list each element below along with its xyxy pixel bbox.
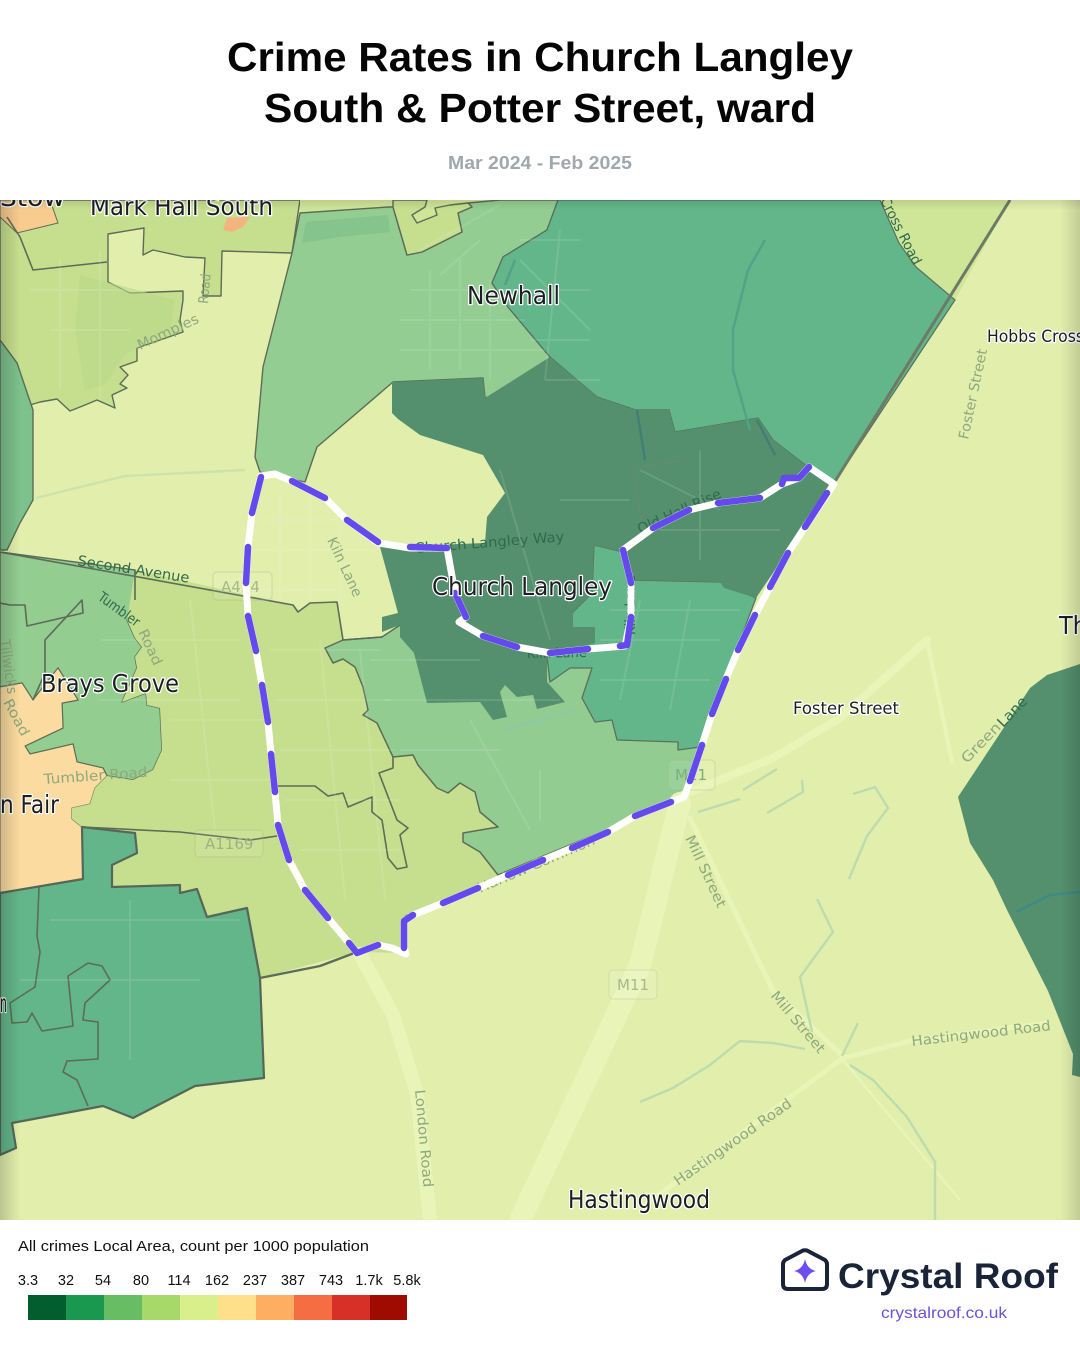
place labels: n bbox=[0, 989, 7, 1018]
road labels: Old Hall Rise bbox=[635, 486, 724, 538]
road labels bbox=[0, 195, 1052, 1189]
legend scale labels: 3.3 bbox=[18, 1273, 38, 1289]
road labels: Tumbler bbox=[94, 589, 143, 631]
website: crystalroof.co.uk bbox=[881, 1305, 1008, 1322]
road shields bbox=[195, 572, 715, 999]
region: Potter Street medium green bbox=[325, 625, 705, 875]
place labels: Hastingwood bbox=[568, 1185, 710, 1214]
title: Crime Rates in Church Langley bbox=[227, 34, 853, 80]
region: Newhall medium green bbox=[255, 200, 558, 482]
residential streets bbox=[20, 205, 780, 1060]
icon: house with star bbox=[783, 1250, 827, 1289]
place labels: Brays Grove bbox=[41, 669, 179, 698]
road labels: Kiln Lane bbox=[623, 575, 639, 635]
road labels: Tumbler Road bbox=[42, 765, 148, 788]
road labels: Road bbox=[196, 273, 215, 304]
region: north-west light green bbox=[0, 200, 300, 411]
ward boundary: purple dashes bbox=[246, 467, 827, 953]
legend scale labels: 237 bbox=[243, 1273, 267, 1289]
legend bbox=[18, 1239, 421, 1320]
legend scale labels: 5.8k bbox=[393, 1273, 421, 1289]
legend scale labels: 387 bbox=[281, 1273, 305, 1289]
road labels: Green bbox=[958, 720, 1005, 767]
region: Church Langley east teal bbox=[547, 545, 756, 750]
road labels: Harlow Common bbox=[475, 833, 598, 897]
road labels: Church Langley Way bbox=[414, 529, 565, 557]
region: Church Langley dark green bbox=[380, 357, 834, 720]
road labels: Cross Road bbox=[876, 195, 924, 268]
place labels bbox=[0, 183, 1080, 1214]
ward boundary: white casing bbox=[246, 467, 834, 954]
region: north-west orange corner bbox=[0, 200, 58, 233]
legend scale labels: 80 bbox=[133, 1273, 149, 1289]
place labels: Newhall bbox=[467, 281, 560, 310]
legend scale labels: 54 bbox=[95, 1273, 111, 1289]
region: Newhall darker top band bbox=[302, 215, 390, 243]
region: Newhall east teal bbox=[492, 200, 955, 483]
legend title: All crimes Local Area, count per 1000 population bbox=[18, 1239, 369, 1255]
region: Brays Grove medium green bbox=[0, 552, 162, 780]
road shields: M11 bbox=[675, 766, 707, 784]
region: Harlow south teal bbox=[0, 827, 264, 1155]
road labels: Road bbox=[0, 696, 32, 739]
place labels: Church Langley bbox=[432, 572, 612, 601]
choropleth map bbox=[0, 183, 1080, 1220]
road labels: Momples bbox=[135, 311, 202, 354]
road labels: Mill Street bbox=[681, 833, 729, 911]
road labels: Lane bbox=[994, 694, 1031, 731]
region: Newhall top pocket bbox=[393, 200, 472, 255]
place labels: Stow bbox=[0, 183, 65, 212]
wordmark: Crystal Roof bbox=[838, 1257, 1058, 1296]
road labels: Mill Street bbox=[767, 988, 828, 1057]
road labels: Road bbox=[134, 627, 165, 668]
subtitle: date range: Mar 2024 - Feb 2025 bbox=[448, 153, 632, 173]
legend scale labels: 114 bbox=[167, 1273, 191, 1289]
road shields: A414 bbox=[221, 578, 260, 596]
place labels: n Fair bbox=[0, 790, 60, 819]
roads bbox=[360, 640, 1047, 1220]
region: east-side light wedge bbox=[880, 200, 1010, 300]
road shields: M11 bbox=[617, 976, 649, 994]
map base: low-crime area bbox=[0, 200, 1080, 1220]
legend scale labels bbox=[18, 1273, 421, 1289]
interior boundaries in dark ward bbox=[633, 460, 683, 520]
place labels: Mark Hall South bbox=[90, 192, 273, 221]
region: north light green strip bbox=[300, 200, 490, 222]
title: South & Potter Street, ward bbox=[264, 85, 816, 131]
legend scale labels: 743 bbox=[319, 1273, 343, 1289]
shaded patch in north-west region bbox=[75, 275, 175, 390]
legend scale labels: 162 bbox=[205, 1273, 229, 1289]
logo: Crystal Roof bbox=[783, 1250, 1058, 1322]
motorway boundary line bbox=[834, 200, 1010, 483]
road labels: Kiln Lane bbox=[527, 645, 587, 662]
region: Mark Hall orange patch bbox=[223, 217, 250, 232]
road labels: Foster Street bbox=[956, 347, 991, 441]
legend scale labels: 1.7k bbox=[355, 1273, 383, 1289]
streams bbox=[36, 240, 1080, 1220]
road shields: A1169 bbox=[205, 835, 253, 853]
road labels: London Road bbox=[411, 1089, 435, 1188]
legend scale labels: 32 bbox=[58, 1273, 74, 1289]
road labels: Hastingwood Road bbox=[911, 1018, 1052, 1050]
title bbox=[227, 34, 853, 131]
region: eastern dark green bbox=[958, 664, 1080, 1077]
region: south Potter Street light green bbox=[72, 570, 500, 978]
map edge vignette bbox=[0, 200, 1080, 1220]
region: Harlow orange bbox=[0, 668, 107, 893]
region boundaries bbox=[0, 216, 466, 1106]
road labels: Second Avenue bbox=[76, 553, 190, 587]
road labels: Kiln Lane bbox=[323, 535, 365, 600]
legend colour bar bbox=[28, 1295, 407, 1320]
region: north-west strip teal bbox=[0, 340, 33, 550]
road labels: Hastingwood Road bbox=[671, 1096, 795, 1189]
place labels: Foster Street bbox=[793, 699, 899, 719]
